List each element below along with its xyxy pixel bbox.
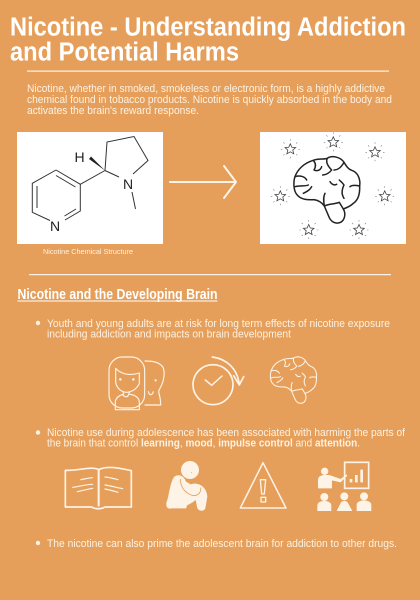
- icon: warning triangle: [240, 463, 286, 508]
- bullet 1: including addiction and impacts on brain development: [47, 328, 291, 340]
- bullet 2: the brain that control learning, mood, impulse control and attention.: [47, 438, 360, 450]
- intro text: Nicotine, whether in smoked, smokeless or electronic form, is a highly addictive: [27, 83, 385, 95]
- icon: brain outline: [270, 357, 317, 403]
- panel: nicotine chemical structure: N: [123, 176, 133, 192]
- panel: nicotine chemical structure: [17, 132, 163, 244]
- intro text: chemical found in tobacco products. Nicotine is quickly absorbed in the body and: [27, 94, 392, 106]
- arrow: [170, 166, 236, 198]
- bullet 3: The nicotine can also prime the adolescent brain for addiction to other drugs.: [47, 538, 397, 550]
- intro text: [27, 83, 392, 117]
- title: [10, 14, 406, 66]
- icon: young people: [109, 357, 164, 410]
- intro text: activates the brain's reward response.: [27, 105, 199, 117]
- molecule bonds: [32, 136, 148, 220]
- reward stars: [271, 132, 394, 239]
- title: and Potential Harms: [10, 38, 239, 66]
- panel: nicotine chemical structure: N: [50, 218, 60, 234]
- wedge bond: [89, 156, 105, 170]
- icon: presenter with audience: [317, 462, 371, 511]
- bullet 1: Youth and young adults are at risk for long term effects of nicotine exposure: [47, 318, 390, 330]
- icon: open book: [65, 467, 131, 509]
- caption: Nicotine Chemical Structure: [43, 247, 133, 256]
- bullet 1: [36, 318, 390, 340]
- bullet 2: [36, 427, 406, 450]
- panel: nicotine chemical structure: H: [74, 149, 85, 165]
- panel: brain reward response: [260, 132, 406, 244]
- icon: clock with arrow: [193, 357, 244, 405]
- icon: brain: [294, 157, 360, 223]
- icon: sad seated person: [166, 461, 207, 511]
- heading: developing brain: Nicotine and the Developing Brain: [18, 287, 218, 303]
